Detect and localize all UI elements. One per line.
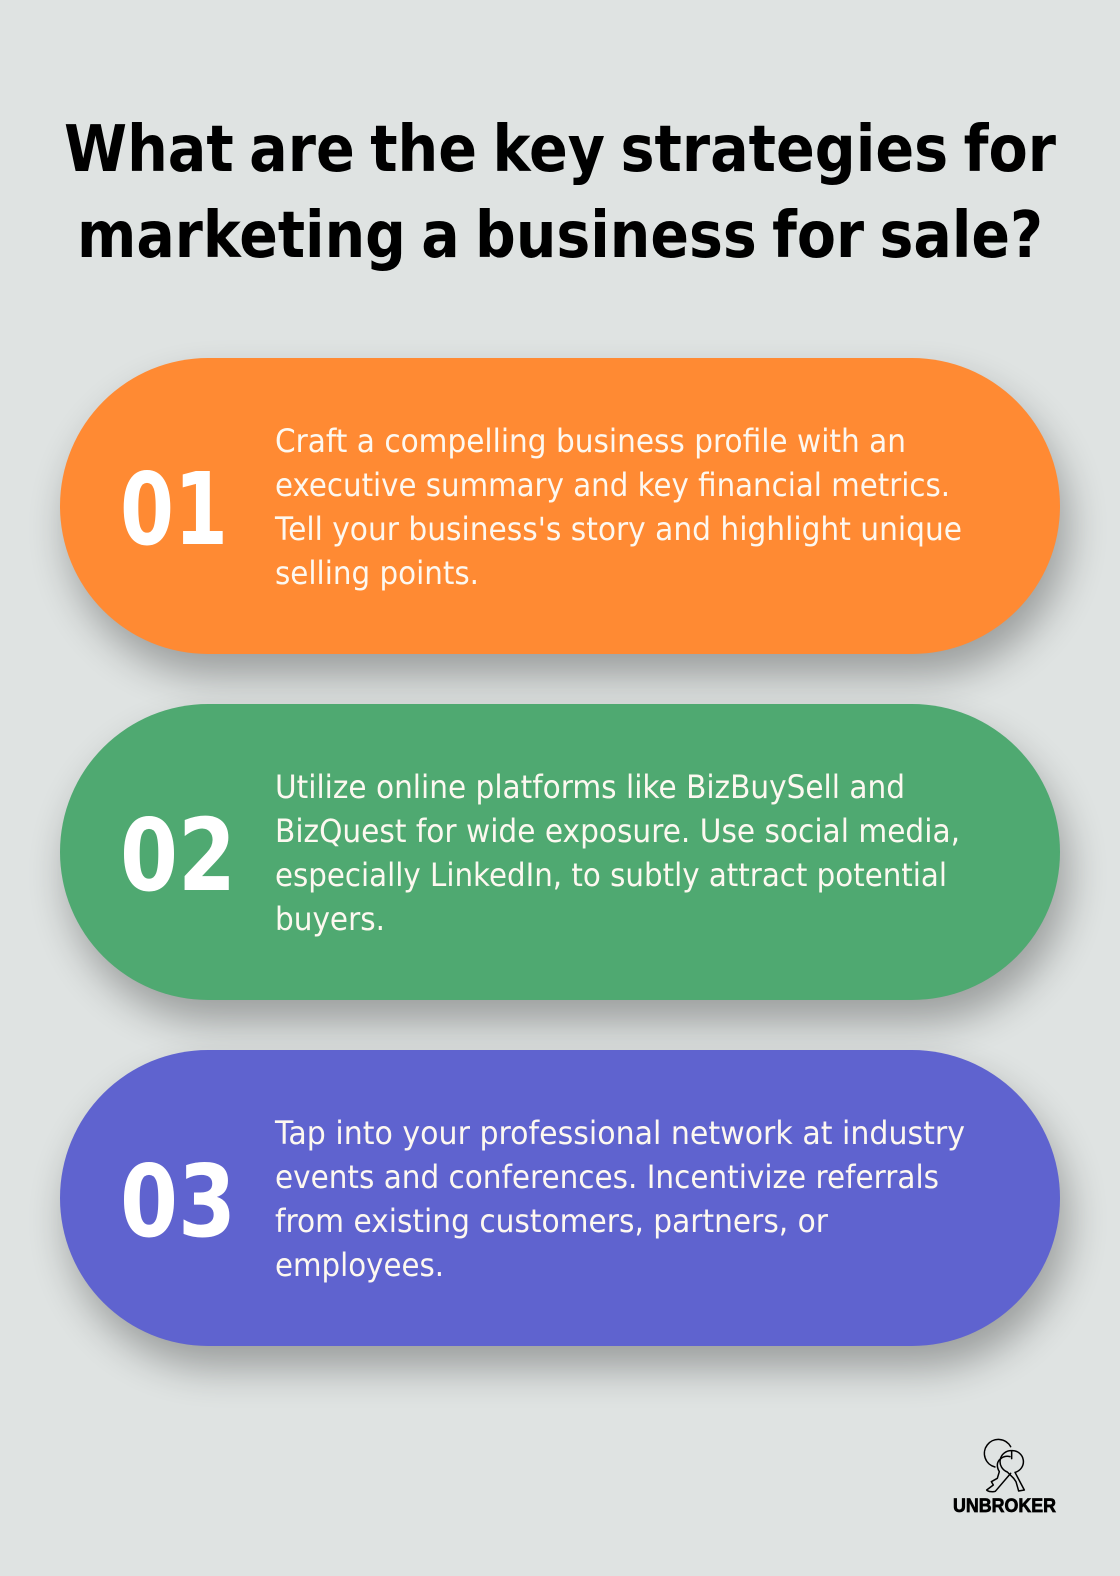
panel: step 01 xyxy=(60,358,1068,676)
step text 03: events and conferences. Incentivize referrals xyxy=(275,1158,939,1196)
step text 02 xyxy=(275,768,960,938)
title xyxy=(64,113,1056,273)
step text 01 xyxy=(274,422,962,592)
step text 01: executive summary and key financial metrics. xyxy=(275,466,950,504)
icon: keys xyxy=(984,1439,1024,1492)
step text 03 xyxy=(274,1114,965,1284)
step text 03: employees. xyxy=(275,1246,444,1284)
step text 02: Utilize online platforms like BizBuySell and xyxy=(275,768,905,806)
step number 01: 01 xyxy=(120,451,228,568)
panel: step 02 xyxy=(60,704,1068,1022)
step text 03: Tap into your professional network at industry xyxy=(274,1114,965,1152)
step text 02: buyers. xyxy=(275,900,385,938)
step text 01: Tell your business's story and highlight unique xyxy=(274,510,962,548)
step number 03: 03 xyxy=(120,1143,236,1260)
panel: step 03 xyxy=(60,1050,1068,1368)
step number 02: 02 xyxy=(120,797,236,914)
logo: Unbroker xyxy=(953,1439,1056,1517)
step text 01: Craft a compelling business profile with an xyxy=(275,422,906,460)
step text 02: especially LinkedIn, to subtly attract potential xyxy=(275,856,947,894)
step text 02: BizQuest for wide exposure. Use social media, xyxy=(275,812,960,850)
step text 03: from existing customers, partners, or xyxy=(275,1202,829,1240)
step text 01: selling points. xyxy=(275,554,479,592)
wordmark: UNBROKER xyxy=(953,1496,1056,1517)
